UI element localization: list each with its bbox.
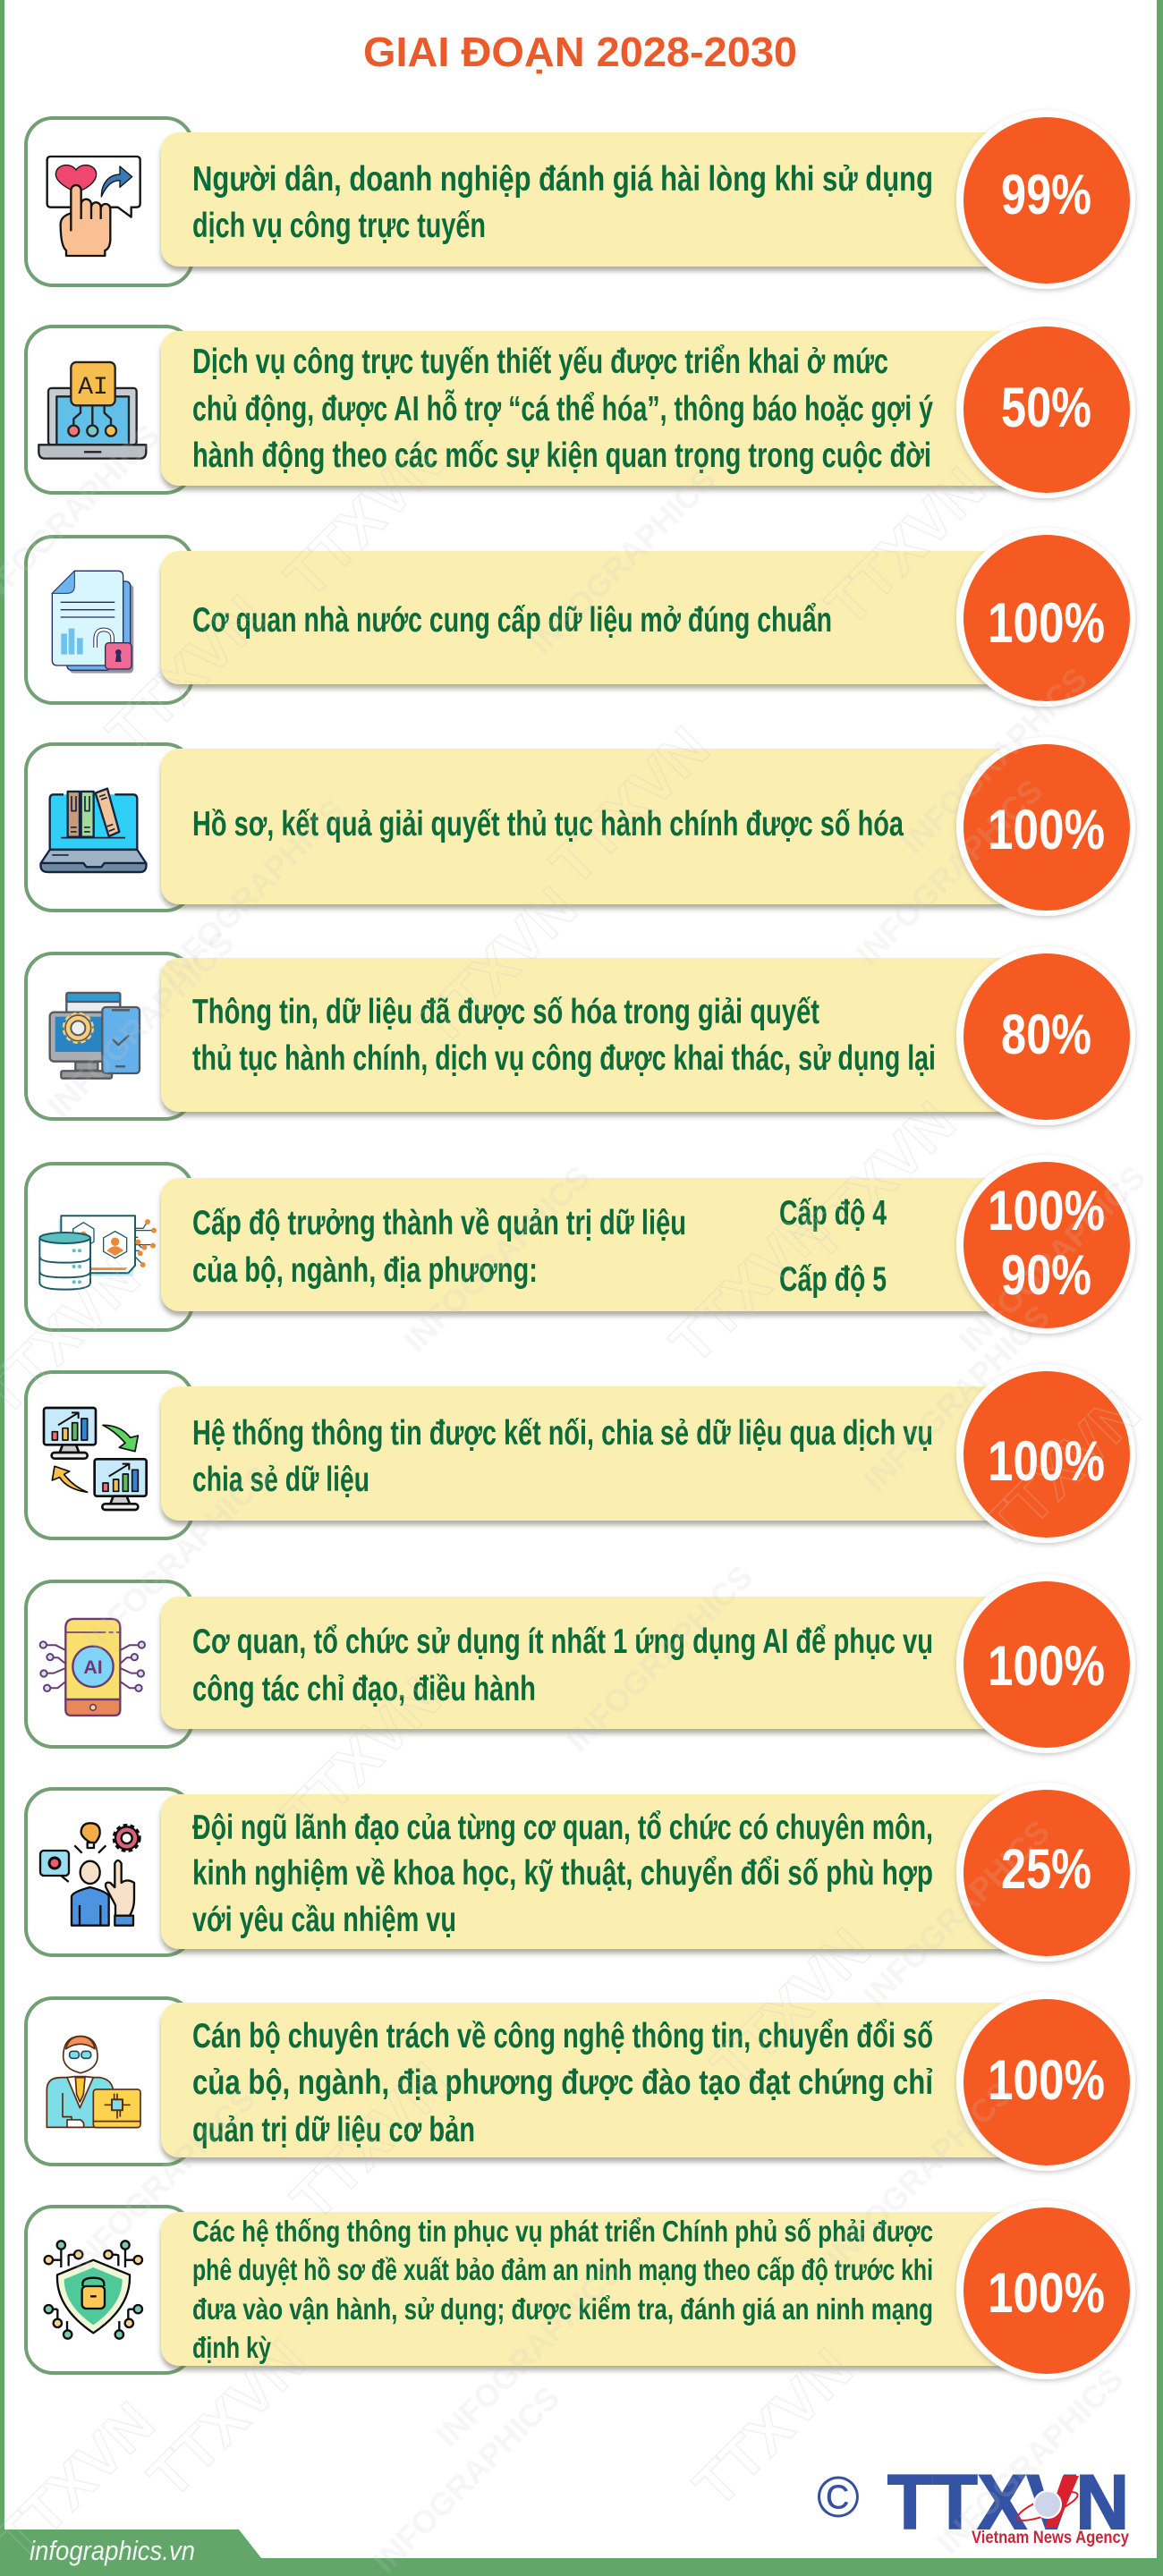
watermarks: INFOGRAPHICS (856, 1813, 1057, 2013)
description: Hệ thống thông tin được kết nối, chia sẻ dữ liệu qua dịch vụ (192, 1414, 933, 1453)
watermarks: INFOGRAPHICS (429, 2253, 629, 2453)
watermarks: TTXVN (658, 1192, 841, 1376)
badge 100% (956, 737, 1135, 916)
icon card (26, 326, 192, 493)
watermarks: TTXVN (135, 2326, 318, 2510)
panel: row 6 data governance maturity (26, 1155, 1135, 1334)
icon: books on laptop (40, 789, 146, 872)
description (192, 2215, 933, 2364)
left page border (0, 0, 4, 2576)
description: dịch vụ công trực tuyến (192, 207, 486, 245)
watermarks: TTXVN (784, 1089, 967, 1272)
icon card (26, 537, 192, 703)
description: Cán bộ chuyên trách về công nghệ thông tin, chuyển đổi số (192, 2017, 933, 2055)
text bar (161, 2003, 1020, 2157)
watermarks: TTXVN (405, 874, 589, 1057)
watermarks: INFOGRAPHICS (40, 924, 241, 1124)
text bar (161, 132, 1020, 267)
icon card (26, 1164, 192, 1330)
description: phê duyệt hồ sơ đề xuất bảo đảm an ninh mạng theo cấp độ trước khi (192, 2253, 933, 2286)
watermarks: INFOGRAPHICS (849, 772, 1049, 972)
description (192, 1623, 933, 1708)
badge 100% and 90%: 100% (988, 1180, 1105, 1242)
watermarks: INFOGRAPHICS (856, 1298, 1057, 1498)
icon card (26, 1581, 192, 1747)
watermarks: TTXVN (272, 427, 455, 610)
badge 100%: 100% (988, 2049, 1105, 2112)
panel: row 5 data reuse (26, 946, 1135, 1125)
badge 100%: 100% (988, 592, 1105, 655)
icon card (26, 2207, 192, 2373)
description: của bộ, ngành, địa phương: (192, 1251, 538, 1290)
description: Các hệ thống thông tin phục vụ phát triển Chính phủ số phải được (192, 2215, 933, 2248)
description: của bộ, ngành, địa phương được đào tạo đạt chứng chỉ (192, 2063, 933, 2102)
icon: AI smartphone (40, 1619, 145, 1716)
title: GIAI ĐOẠN 2028-2030 (363, 29, 797, 75)
badge 50% (956, 319, 1135, 498)
icon card (26, 1998, 192, 2165)
description: với yêu cầu nhiệm vụ (192, 1901, 456, 1939)
text bar (161, 1794, 1020, 1949)
watermarks: INFOGRAPHICS (952, 1158, 1152, 1359)
watermarks: TTXVN (538, 714, 721, 897)
badge 100% and 90%: 90% (1001, 1244, 1091, 1307)
badge 100%: 100% (988, 1430, 1105, 1493)
badge 100% (956, 1364, 1135, 1543)
icon card (26, 118, 192, 285)
text bar (161, 958, 1020, 1112)
panel: row 2 proactive services (26, 319, 1135, 498)
description: Dịch vụ công trực tuyến thiết yếu được triển khai ở mức (192, 343, 888, 381)
badge 100% (956, 528, 1135, 707)
icon: hand tapping heart (47, 157, 140, 256)
badge 100%: 100% (988, 2262, 1105, 2325)
description: Thông tin, dữ liệu đã được số hóa trong giải quyết (192, 993, 819, 1031)
watermarks: TTXVN (969, 1378, 1152, 1562)
watermarks: TTXVN (278, 2049, 462, 2233)
text bar (161, 551, 1020, 684)
watermarks: INFOGRAPHICS (894, 660, 1094, 860)
description (192, 1204, 686, 1290)
watermarks: INFOGRAPHICS (396, 1158, 597, 1359)
badge 100%: 100% (988, 799, 1105, 861)
logo: TTXVN Vietnam News Agency: TTXVN (887, 2460, 1129, 2546)
badge 50%: 50% (1001, 377, 1091, 439)
badge 99%: 99% (1001, 164, 1091, 226)
text bar (161, 331, 1020, 486)
watermarks: INFOGRAPHICS (366, 2379, 566, 2576)
icon: document with padlock (52, 571, 133, 674)
text bar (161, 1597, 1020, 1729)
description: Hồ sơ, kết quả giải quyết thủ tục hành chính được số hóa (192, 805, 904, 843)
panel: row 8 AI application (26, 1574, 1135, 1753)
description: Cơ quan nhà nước cung cấp dữ liệu mở đúng chuẩn (192, 601, 832, 640)
icon: database and profiles (39, 1216, 157, 1290)
panel: row 4 digitized records (26, 737, 1135, 916)
badge 25%: 25% (1001, 1838, 1091, 1901)
watermarks: INFOGRAPHICS (559, 1558, 760, 1758)
watermarks: TTXVN (813, 454, 997, 638)
watermarks: TTXVN (681, 2335, 864, 2519)
description (192, 2017, 933, 2149)
footer site name: infographics.vn (30, 2535, 195, 2566)
description: hành động theo các mốc sự kiện quan trọng trong cuộc đời (192, 436, 931, 475)
right page border (1157, 0, 1163, 2576)
description: định kỳ (192, 2331, 271, 2364)
level labels (779, 1194, 887, 1299)
panel: row 1 satisfaction (26, 110, 1135, 289)
icon card (26, 1789, 192, 1955)
icon: monitor, gear and phone (50, 993, 140, 1079)
icon card (26, 1372, 192, 1538)
icon: AI laptop: AI (78, 374, 108, 402)
badge 100% (956, 1992, 1135, 2171)
text bar (161, 1178, 1020, 1311)
panel: row 3 open data (26, 528, 1135, 707)
panel: row 9 leadership (26, 1783, 1135, 1962)
icon: specialist with chip laptop (47, 2037, 140, 2128)
watermarks: TTXVN (94, 582, 277, 766)
panel: row 11 cybersecurity (26, 2200, 1135, 2379)
icon card (26, 744, 192, 911)
description: công tác chỉ đạo, điều hành (192, 1670, 536, 1708)
description (192, 343, 933, 475)
watermarks: INFOGRAPHICS (522, 461, 723, 661)
watermarks: TTXVN (699, 1915, 882, 2098)
description (192, 993, 936, 1078)
text bar (161, 2212, 1020, 2366)
watermarks: TTXVN (269, 1665, 453, 1848)
level labels: Cấp độ 4 (779, 1194, 887, 1233)
description: kinh nghiệm về khoa học, kỹ thuật, chuyển đổi số phù hợp (192, 1854, 933, 1893)
watermarks: INFOGRAPHICS (77, 1458, 277, 1658)
icon: expert with ideas (40, 1823, 139, 1926)
copyright symbol: © (817, 2464, 860, 2529)
badge 25% (956, 1783, 1135, 1962)
badge 100% (956, 2200, 1135, 2379)
footer band (0, 2529, 1163, 2576)
icon: AI laptop (38, 362, 146, 459)
description (192, 1414, 933, 1499)
badge 99% (956, 110, 1135, 289)
description (192, 1809, 933, 1939)
panel: row 7 connected systems (26, 1364, 1135, 1543)
badge 100% and 90% (956, 1155, 1135, 1334)
badge 100%: 100% (988, 1635, 1105, 1698)
description: Cấp độ trưởng thành về quản trị dữ liệu (192, 1204, 686, 1242)
level labels: Cấp độ 5 (779, 1260, 887, 1299)
icon card (26, 953, 192, 1119)
logo: TTXVN Vietnam News Agency: Vietnam News Agency (972, 2529, 1129, 2547)
description (192, 160, 933, 245)
description: đưa vào vận hành, sử dụng; được kiểm tra, đánh giá an ninh mạng (192, 2292, 933, 2326)
watermarks: INFOGRAPHICS (151, 792, 352, 992)
badge 100% (956, 1574, 1135, 1753)
description: Cơ quan, tổ chức sử dụng ít nhất 1 ứng dụng AI để phục vụ (192, 1623, 933, 1661)
description: Người dân, doanh nghiệp đánh giá hài lòng khi sử dụng (192, 160, 933, 199)
description: chia sẻ dữ liệu (192, 1461, 369, 1499)
icon: shield with circuit (45, 2241, 142, 2339)
panel: row 10 IT staff (26, 1992, 1135, 2171)
icon: two monitors exchanging data (44, 1408, 147, 1510)
watermarks: INFOGRAPHICS (62, 2080, 262, 2281)
text bar (161, 749, 1020, 904)
description: quản trị dữ liệu cơ bản (192, 2111, 475, 2149)
watermarks: INFOGRAPHICS (819, 2074, 1019, 2275)
text bar (161, 1386, 1020, 1521)
badge 80%: 80% (1001, 1004, 1091, 1066)
icon: AI smartphone: AI (83, 1657, 103, 1678)
watermarks: INFOGRAPHICS (930, 2360, 1130, 2561)
badge 80% (956, 946, 1135, 1125)
